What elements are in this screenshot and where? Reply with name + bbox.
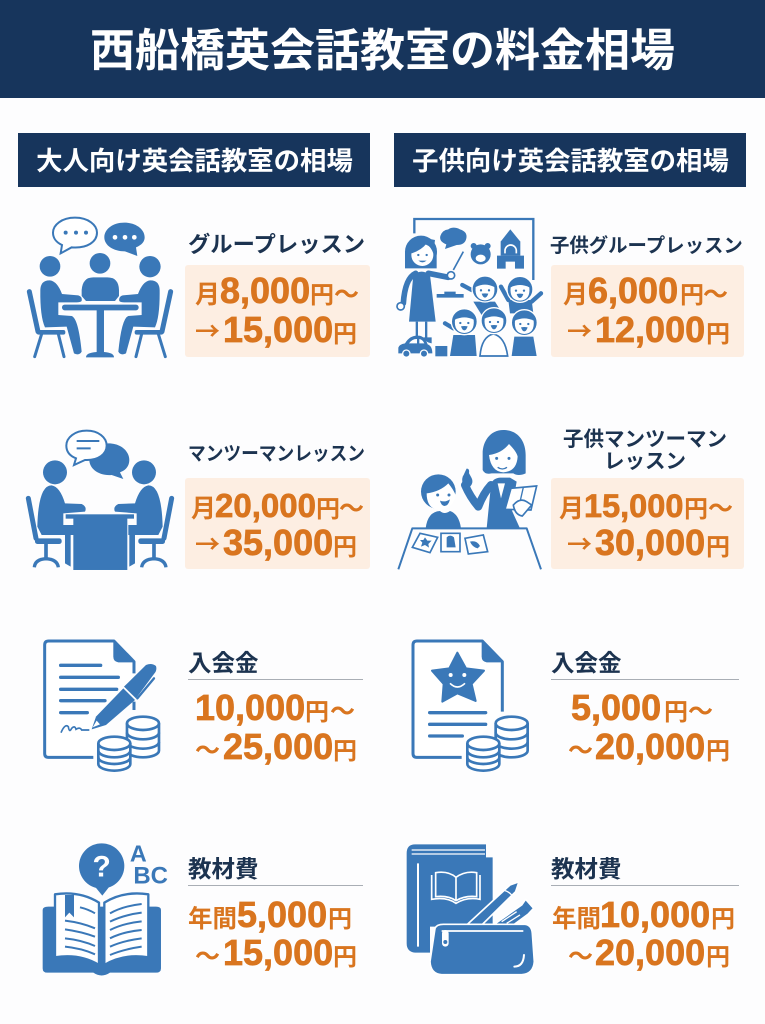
price: admission fee adult: [195, 687, 357, 767]
label: one-to-one lesson: マンツーマンレッスン: [188, 443, 365, 465]
price: materials fee child: 円: [711, 899, 735, 934]
price: admission fee child: ～: [568, 731, 593, 767]
price: materials fee adult: 円: [333, 937, 357, 972]
price box: group lesson: 円: [310, 275, 334, 310]
price box: children group lesson: [551, 265, 744, 357]
price box: children one-to-one lesson: 円: [684, 489, 708, 524]
label: children one-to-one lesson: レッスン: [604, 450, 686, 473]
heading: children classes: 子供向け英会話教室の相場: [412, 146, 729, 176]
price: materials fee adult: 年間: [188, 900, 237, 935]
price: materials fee child: 年間: [552, 900, 601, 935]
price box: children one-to-one lesson: [551, 478, 744, 569]
price: admission fee adult: 25,000: [223, 726, 333, 767]
price box: children group lesson: →: [567, 312, 592, 348]
price box: children group lesson: 月: [563, 275, 588, 311]
price box: group lesson: 月: [195, 275, 220, 311]
icon: contract and coins: [45, 641, 159, 771]
price box: one-to-one lesson: 35,000: [223, 522, 333, 563]
price box: group lesson: ～: [334, 275, 359, 311]
price: admission fee adult: 10,000: [195, 687, 305, 728]
price box: one-to-one lesson: 円: [333, 527, 357, 562]
icon: open book with question: A: [130, 841, 147, 867]
label: materials fee child: 教材費: [551, 856, 622, 882]
divider: admission fee child: [551, 679, 739, 680]
price box: one-to-one lesson: 20,000: [215, 487, 316, 524]
price box: one-to-one lesson: →: [195, 525, 220, 561]
price: admission fee adult: ～: [195, 731, 220, 767]
price: materials fee adult: 円: [328, 899, 352, 934]
price: materials fee child: 20,000: [595, 932, 705, 973]
price box: group lesson: 15,000: [223, 309, 333, 350]
divider: materials fee child: [551, 885, 739, 886]
price: materials fee adult: [188, 894, 357, 973]
price box: children one-to-one lesson: 円: [706, 527, 730, 562]
label: children group lesson: 子供グループレッスン: [550, 234, 743, 257]
label: admission fee adult: 入会金: [188, 650, 259, 676]
divider: admission fee adult: [188, 679, 363, 680]
icon: children group lesson: [397, 219, 541, 357]
price: admission fee child: 円: [664, 692, 688, 727]
icon: one-to-one lesson: [28, 431, 172, 570]
title banner: [0, 0, 765, 98]
icon: children one-to-one lesson: [398, 430, 541, 569]
price: materials fee child: [552, 894, 735, 973]
icon: book and pencil case: [407, 844, 534, 975]
price: materials fee adult: 5,000: [237, 894, 327, 935]
price: admission fee adult: 円: [305, 692, 329, 727]
price box: group lesson: 8,000: [220, 270, 310, 311]
heading: children classes: [394, 133, 746, 187]
price: admission fee child: 円: [706, 731, 730, 766]
price box: group lesson: [185, 265, 370, 357]
price box: children group lesson: 6,000: [588, 270, 678, 311]
price box: children group lesson: 12,000: [595, 309, 705, 350]
price: materials fee adult: ～: [195, 937, 220, 973]
price box: children one-to-one lesson: 月: [559, 489, 584, 525]
price box: one-to-one lesson: ～: [339, 489, 364, 525]
price box: children one-to-one lesson: ～: [708, 489, 733, 525]
heading: adult classes: 大人向け英会話教室の相場: [36, 146, 353, 176]
price: admission fee adult: ～: [330, 692, 355, 728]
label: children one-to-one lesson: [563, 428, 727, 473]
price: admission fee child: 5,000: [571, 687, 661, 728]
price: materials fee child: 10,000: [600, 894, 710, 935]
icon: star document and coins: [413, 641, 528, 771]
price box: one-to-one lesson: 月: [191, 489, 216, 525]
price box: children one-to-one lesson: 30,000: [595, 522, 705, 563]
label: materials fee adult: 教材費: [188, 856, 258, 882]
price box: children one-to-one lesson: →: [567, 525, 592, 561]
price: admission fee child: ～: [688, 692, 713, 728]
price box: children one-to-one lesson: 15,000: [584, 488, 683, 524]
price box: group lesson: 円: [333, 314, 357, 349]
price: admission fee child: 20,000: [595, 726, 705, 767]
price: materials fee child: ～: [568, 937, 593, 973]
heading: adult classes: [18, 133, 370, 187]
icon: open book with question: BC: [133, 862, 168, 889]
label: children one-to-one lesson: 子供マンツーマン: [563, 428, 727, 451]
price: admission fee adult: 円: [333, 731, 357, 766]
price box: one-to-one lesson: [185, 478, 370, 569]
divider: materials fee adult: [188, 885, 363, 886]
icon: open book with question: ?: [92, 851, 111, 884]
price box: group lesson: →: [195, 312, 220, 348]
label: admission fee child: 入会金: [551, 650, 622, 676]
price: materials fee adult: 15,000: [223, 932, 333, 973]
price box: children group lesson: 円: [706, 314, 730, 349]
label: group lesson: グループレッスン: [188, 231, 365, 257]
icon: open book with question: [43, 841, 168, 975]
price box: one-to-one lesson: 円: [316, 489, 340, 524]
icon: group lesson: [29, 218, 171, 357]
price: materials fee child: 円: [706, 937, 730, 972]
price: admission fee child: [568, 687, 730, 767]
price box: children group lesson: 円: [680, 275, 704, 310]
price box: children group lesson: ～: [703, 275, 728, 311]
title banner: 西船橋英会話教室の料金相場: [90, 25, 675, 76]
